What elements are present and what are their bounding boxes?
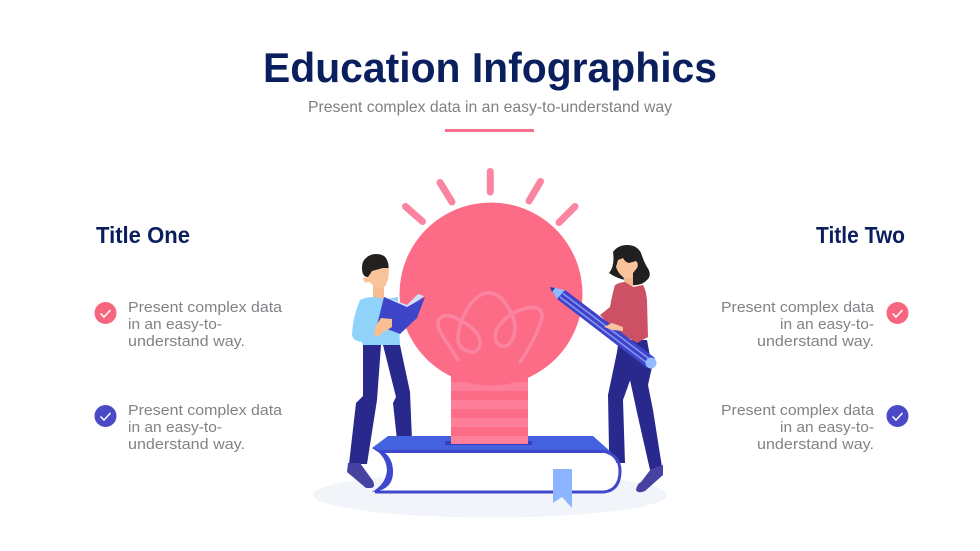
text block: right item one: understand way. [757, 333, 874, 350]
man: sweater [352, 297, 400, 345]
text block: left item one [128, 299, 283, 350]
woman [550, 245, 663, 492]
heading: title one: Title One [96, 222, 190, 248]
text block: right item two: understand way. [757, 436, 874, 453]
bulb: neck [451, 375, 528, 444]
woman: sweater [600, 282, 648, 343]
bookmark [553, 469, 572, 508]
man: open book [377, 294, 425, 334]
bulb: stripes [451, 382, 528, 444]
text block: left item two: Present complex data [128, 402, 283, 419]
panel: title one [94, 222, 283, 453]
text block: left item two [128, 402, 283, 453]
woman: legs [608, 338, 662, 470]
woman: hand [604, 323, 623, 331]
ground shadow [313, 472, 667, 518]
man: legs [349, 345, 412, 464]
title: Education Infographics [263, 44, 717, 91]
text block: left item two: understand way. [128, 436, 245, 453]
book: cover outline [375, 452, 620, 492]
text block: right item one [721, 299, 875, 350]
icon: blue check right [886, 405, 908, 427]
man: face [363, 267, 389, 288]
heading: title two: Title Two [816, 222, 905, 248]
icon: light rays [406, 172, 575, 222]
book: spine [372, 448, 393, 492]
icon: pink check [94, 302, 116, 324]
woman: hair [609, 245, 650, 285]
man: hand [374, 318, 392, 337]
man [347, 254, 425, 488]
man: hair [362, 254, 389, 277]
text block: right item two: in an easy-to- [780, 419, 874, 436]
icon: pink check right [886, 302, 908, 324]
text block: left item one: in an easy-to- [128, 316, 222, 333]
bulb: glass [400, 202, 582, 386]
icon: light bulb [400, 202, 582, 444]
text block: right item two [721, 402, 875, 453]
woman: shoe [636, 465, 663, 492]
woman: face [616, 258, 638, 278]
woman: neck [623, 270, 633, 287]
book: pages [376, 452, 618, 491]
title underline [445, 129, 534, 132]
bulb: filament [438, 293, 542, 362]
text block: left item one: understand way. [128, 333, 245, 350]
book: slot under bulb [445, 441, 532, 445]
man: shoe [347, 463, 374, 488]
text block: left item one: Present complex data [128, 299, 283, 316]
text block: right item one: in an easy-to- [780, 316, 874, 333]
text block: left item two: in an easy-to- [128, 419, 222, 436]
man: neck [373, 285, 384, 300]
subtitle: Present complex data in an easy-to-understand way [308, 99, 672, 116]
text block: right item two: Present complex data [721, 402, 875, 419]
pencil [550, 287, 656, 368]
text block: right item one: Present complex data [721, 299, 875, 316]
book [372, 436, 620, 508]
book: top cover [372, 436, 611, 452]
icon: blue check [94, 405, 116, 427]
panel: title two [721, 222, 908, 453]
